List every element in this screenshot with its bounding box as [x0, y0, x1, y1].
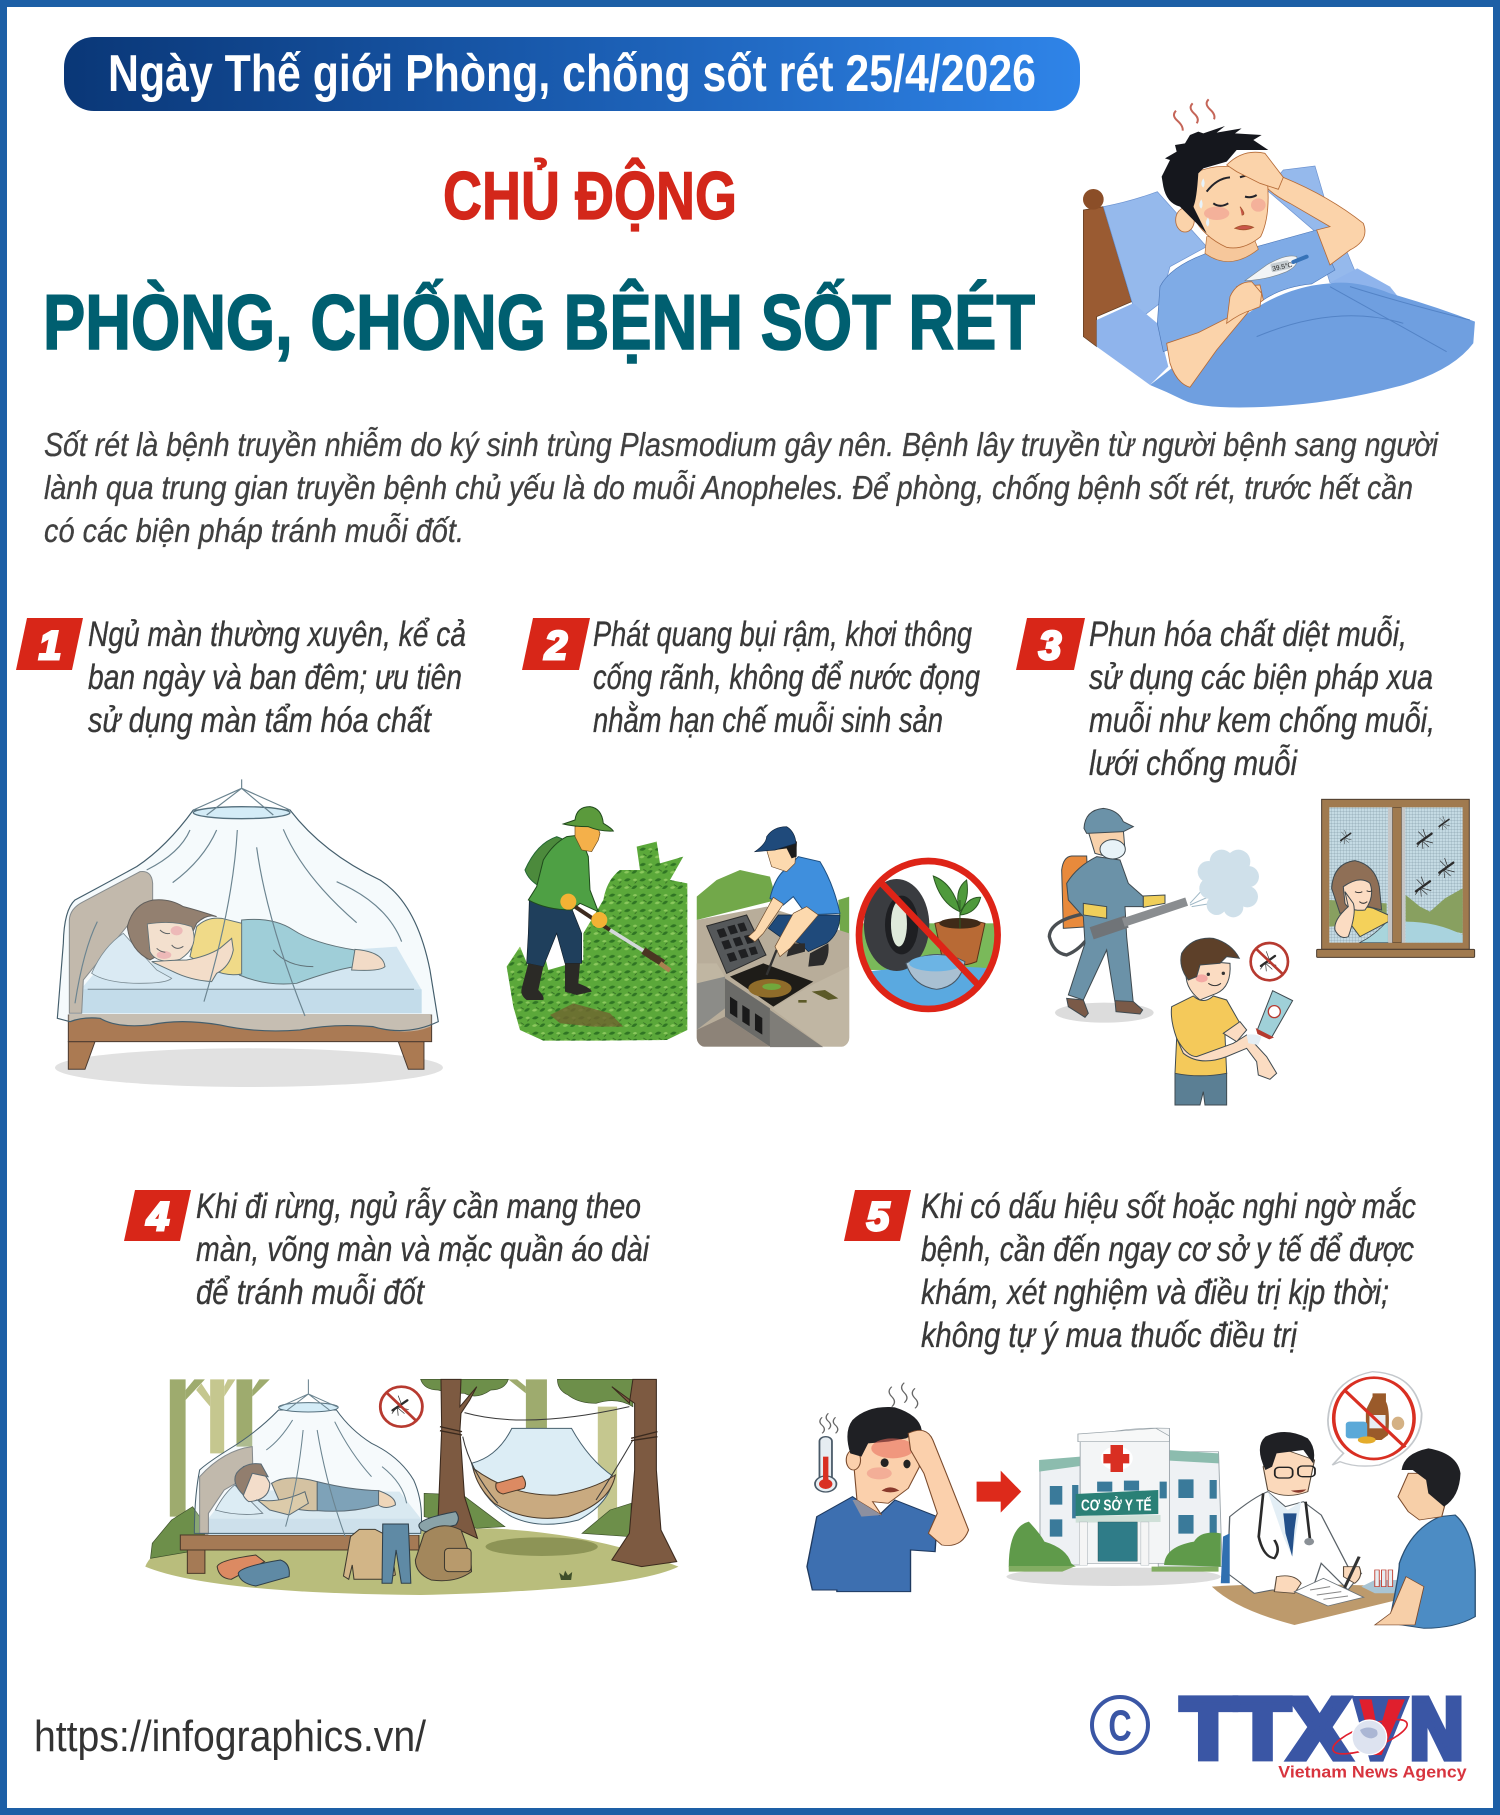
step 3 text: muỗi như kem chống muỗi, — [1089, 701, 1435, 740]
illustration: spraying, repellent cream and window screen — [1049, 799, 1475, 1105]
panel: step 4 — [124, 1187, 678, 1595]
illustration: feverish patient — [807, 1383, 969, 1592]
step 1 text: Ngủ màn thường xuyên, kể cả — [88, 615, 466, 654]
badge 5 — [844, 1190, 911, 1241]
step 4 text: để tránh muỗi đốt — [196, 1273, 425, 1312]
drain scene — [697, 870, 849, 1047]
step 5 text — [921, 1187, 1416, 1355]
logo: copyright and TTXVN: Vietnam News Agency — [1278, 1763, 1467, 1782]
illustration: woman sleeping under mosquito net — [55, 779, 443, 1087]
illustration: health facility: CƠ SỞ Y TẾ — [1081, 1496, 1152, 1514]
step 2 text — [593, 615, 980, 740]
logo: copyright and TTXVN: N — [1410, 1682, 1463, 1777]
panel: step 2 — [507, 615, 1000, 1047]
badge 1: 1 — [39, 624, 61, 668]
step 3 text: sử dụng các biện pháp xua — [1089, 658, 1433, 697]
step 2 text: Phát quang bụi rậm, khơi thông — [593, 615, 972, 654]
boy applying cream — [1171, 938, 1293, 1105]
logo: copyright and TTXVN — [1092, 1682, 1467, 1782]
date banner — [64, 37, 1080, 111]
badge 4: 4 — [146, 1195, 169, 1239]
illustration: forest camp with net, hammock, clothes — [145, 1379, 678, 1595]
illustration: feverish man in bed — [1083, 99, 1475, 407]
illustration: feverish man in bed: 39.5°C — [1271, 261, 1293, 273]
date banner: Ngày Thế giới Phòng, chống sốt rét 25/4/2026 — [108, 45, 1036, 103]
badge 2 — [522, 618, 590, 670]
source url: https://infographics.vn/ — [34, 1712, 427, 1761]
step 4 text: màn, võng màn và mặc quần áo dài — [196, 1230, 650, 1269]
step 2 text: cống rãnh, không để nước đọng — [593, 658, 980, 697]
panel: step 5 — [807, 1187, 1475, 1628]
logo: copyright and TTXVN: TTX — [1181, 1682, 1349, 1777]
badge 5: 5 — [867, 1195, 890, 1239]
logo: copyright and TTXVN: C — [1108, 1703, 1132, 1751]
no standing water sign — [857, 861, 1000, 1013]
step 1 text: ban ngày và ban đêm; ưu tiên — [88, 658, 462, 697]
badge 2: 2 — [544, 624, 567, 668]
badge 3: 3 — [1039, 624, 1061, 668]
step 1 text: sử dụng màn tẩm hóa chất — [88, 701, 432, 740]
step 5 text: khám, xét nghiệm và điều trị kịp thời; — [921, 1273, 1389, 1312]
illustration: health facility — [1007, 1428, 1222, 1586]
step 1 text — [88, 615, 466, 740]
step 4 text: Khi đi rừng, ngủ rẫy cần mang theo — [196, 1187, 641, 1226]
arrow — [977, 1471, 1021, 1513]
panel: step 3 — [1016, 615, 1475, 1105]
title: CHỦ ĐỘNG — [443, 157, 737, 234]
sprayer worker — [1049, 808, 1259, 1023]
step 5 text: không tự ý mua thuốc điều trị — [921, 1316, 1298, 1355]
badge 3 — [1016, 618, 1085, 670]
step 2 text: nhằm hạn chế muỗi sinh sản — [593, 701, 943, 740]
intro paragraph: có các biện pháp tránh muỗi đốt. — [44, 512, 464, 549]
step 3 text: lưới chống muỗi — [1089, 744, 1298, 783]
man clearing bushes — [507, 807, 687, 1041]
title — [43, 157, 1035, 366]
title: PHÒNG, CHỐNG BỆNH SỐT RÉT — [43, 278, 1035, 366]
illustration: doctor consulting patient — [1212, 1372, 1475, 1628]
step 3 text — [1089, 615, 1435, 783]
badge 1 — [16, 618, 83, 670]
illustration: clearing bushes, cleaning drains, removing standing water — [507, 807, 1000, 1047]
step 4 text — [196, 1187, 650, 1312]
panel: step 1 — [16, 615, 466, 1087]
badge 4 — [124, 1190, 191, 1241]
intro paragraph — [44, 426, 1439, 549]
worker at drain — [748, 827, 840, 975]
window with mesh — [1317, 799, 1475, 957]
step 3 text: Phun hóa chất diệt muỗi, — [1089, 615, 1407, 654]
